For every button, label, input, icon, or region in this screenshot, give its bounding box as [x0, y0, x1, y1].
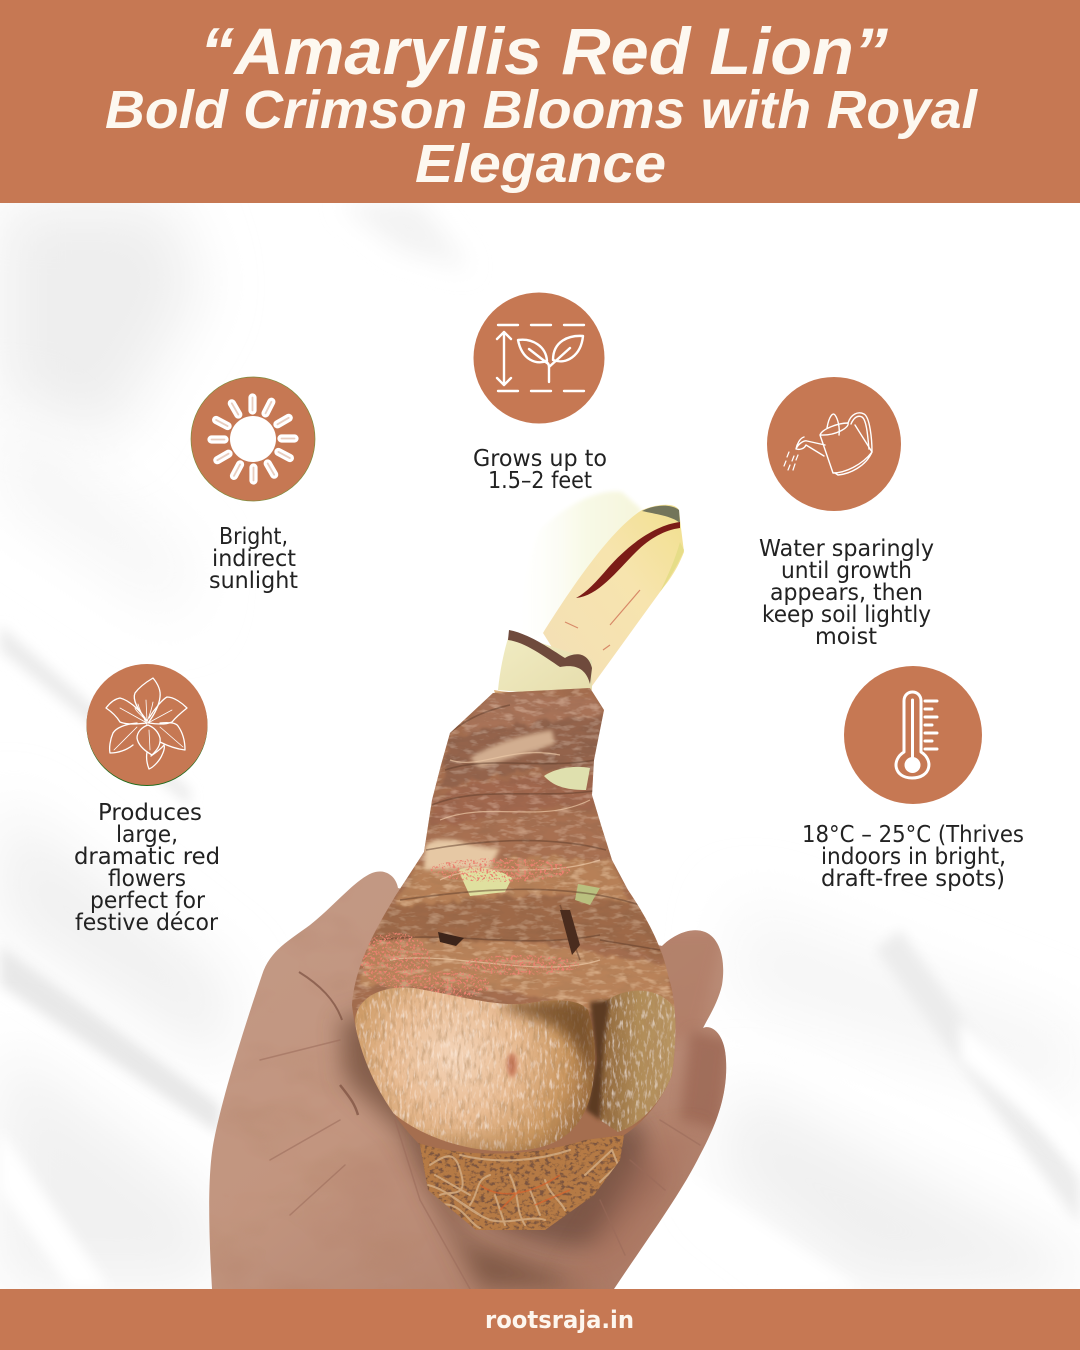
- footer band: [0, 1289, 1080, 1350]
- label: sunlight: sunlight: [209, 568, 298, 594]
- label: temperature: [802, 822, 1024, 892]
- label: temperature: 18°C – 25°C (Thrives: [802, 822, 1024, 848]
- label: flowers: flowers: [108, 866, 186, 892]
- label: watering: appears, then: [770, 580, 923, 606]
- label: sunlight: Bright,: [219, 524, 288, 550]
- title line 3: Elegance: [415, 134, 666, 194]
- bulb body: [352, 688, 676, 1230]
- label: watering: moist: [815, 624, 877, 650]
- label: temperature: indoors in bright,: [821, 844, 1006, 870]
- right lobe of bulb: [586, 991, 678, 1132]
- icon: watering can: [767, 377, 901, 511]
- label: flowers: festive décor: [75, 910, 219, 936]
- label: flowers: Produces: [98, 800, 202, 826]
- label: height: Grows up to: [473, 446, 607, 472]
- footer website: rootsraja.in: [485, 1306, 634, 1334]
- roots at bulb base: [418, 1135, 625, 1236]
- title banner: [0, 0, 1080, 203]
- title line 2: Bold Crimson Blooms with Royal: [105, 80, 978, 140]
- title line 1: “Amaryllis Red Lion”: [200, 14, 888, 88]
- label: flowers: dramatic red: [74, 844, 220, 870]
- label: height: [473, 446, 607, 494]
- main lobe of bulb: [355, 988, 595, 1152]
- label: temperature: draft-free spots): [821, 866, 1005, 892]
- label: flowers: [74, 800, 220, 936]
- feature: height: [473, 292, 607, 494]
- label: watering: keep soil lightly: [762, 602, 931, 628]
- label: watering: Water sparingly: [759, 536, 934, 562]
- label: sunlight: [209, 524, 298, 594]
- feature: temperature: [802, 666, 1024, 892]
- label: flowers: large,: [116, 822, 178, 848]
- feature: watering: [759, 377, 934, 650]
- label: sunlight: indirect: [212, 546, 296, 572]
- icon: thermometer: [844, 666, 982, 804]
- feature: flowers: [74, 664, 220, 936]
- label: flowers: perfect for: [90, 888, 206, 914]
- feature: sunlight: [191, 377, 315, 594]
- label: height: 1.5–2 feet: [488, 468, 592, 494]
- icon: lily flower: [86, 664, 208, 786]
- bud and pale leaf: [517, 491, 684, 686]
- icon: sun: [191, 377, 315, 501]
- icon: plant height: [474, 292, 604, 424]
- bulb neck: [494, 630, 592, 710]
- label: watering: until growth: [781, 558, 912, 584]
- photo: hand holding amaryllis bulb: [200, 491, 740, 1290]
- label: watering: [759, 536, 934, 650]
- hand: [200, 860, 740, 1290]
